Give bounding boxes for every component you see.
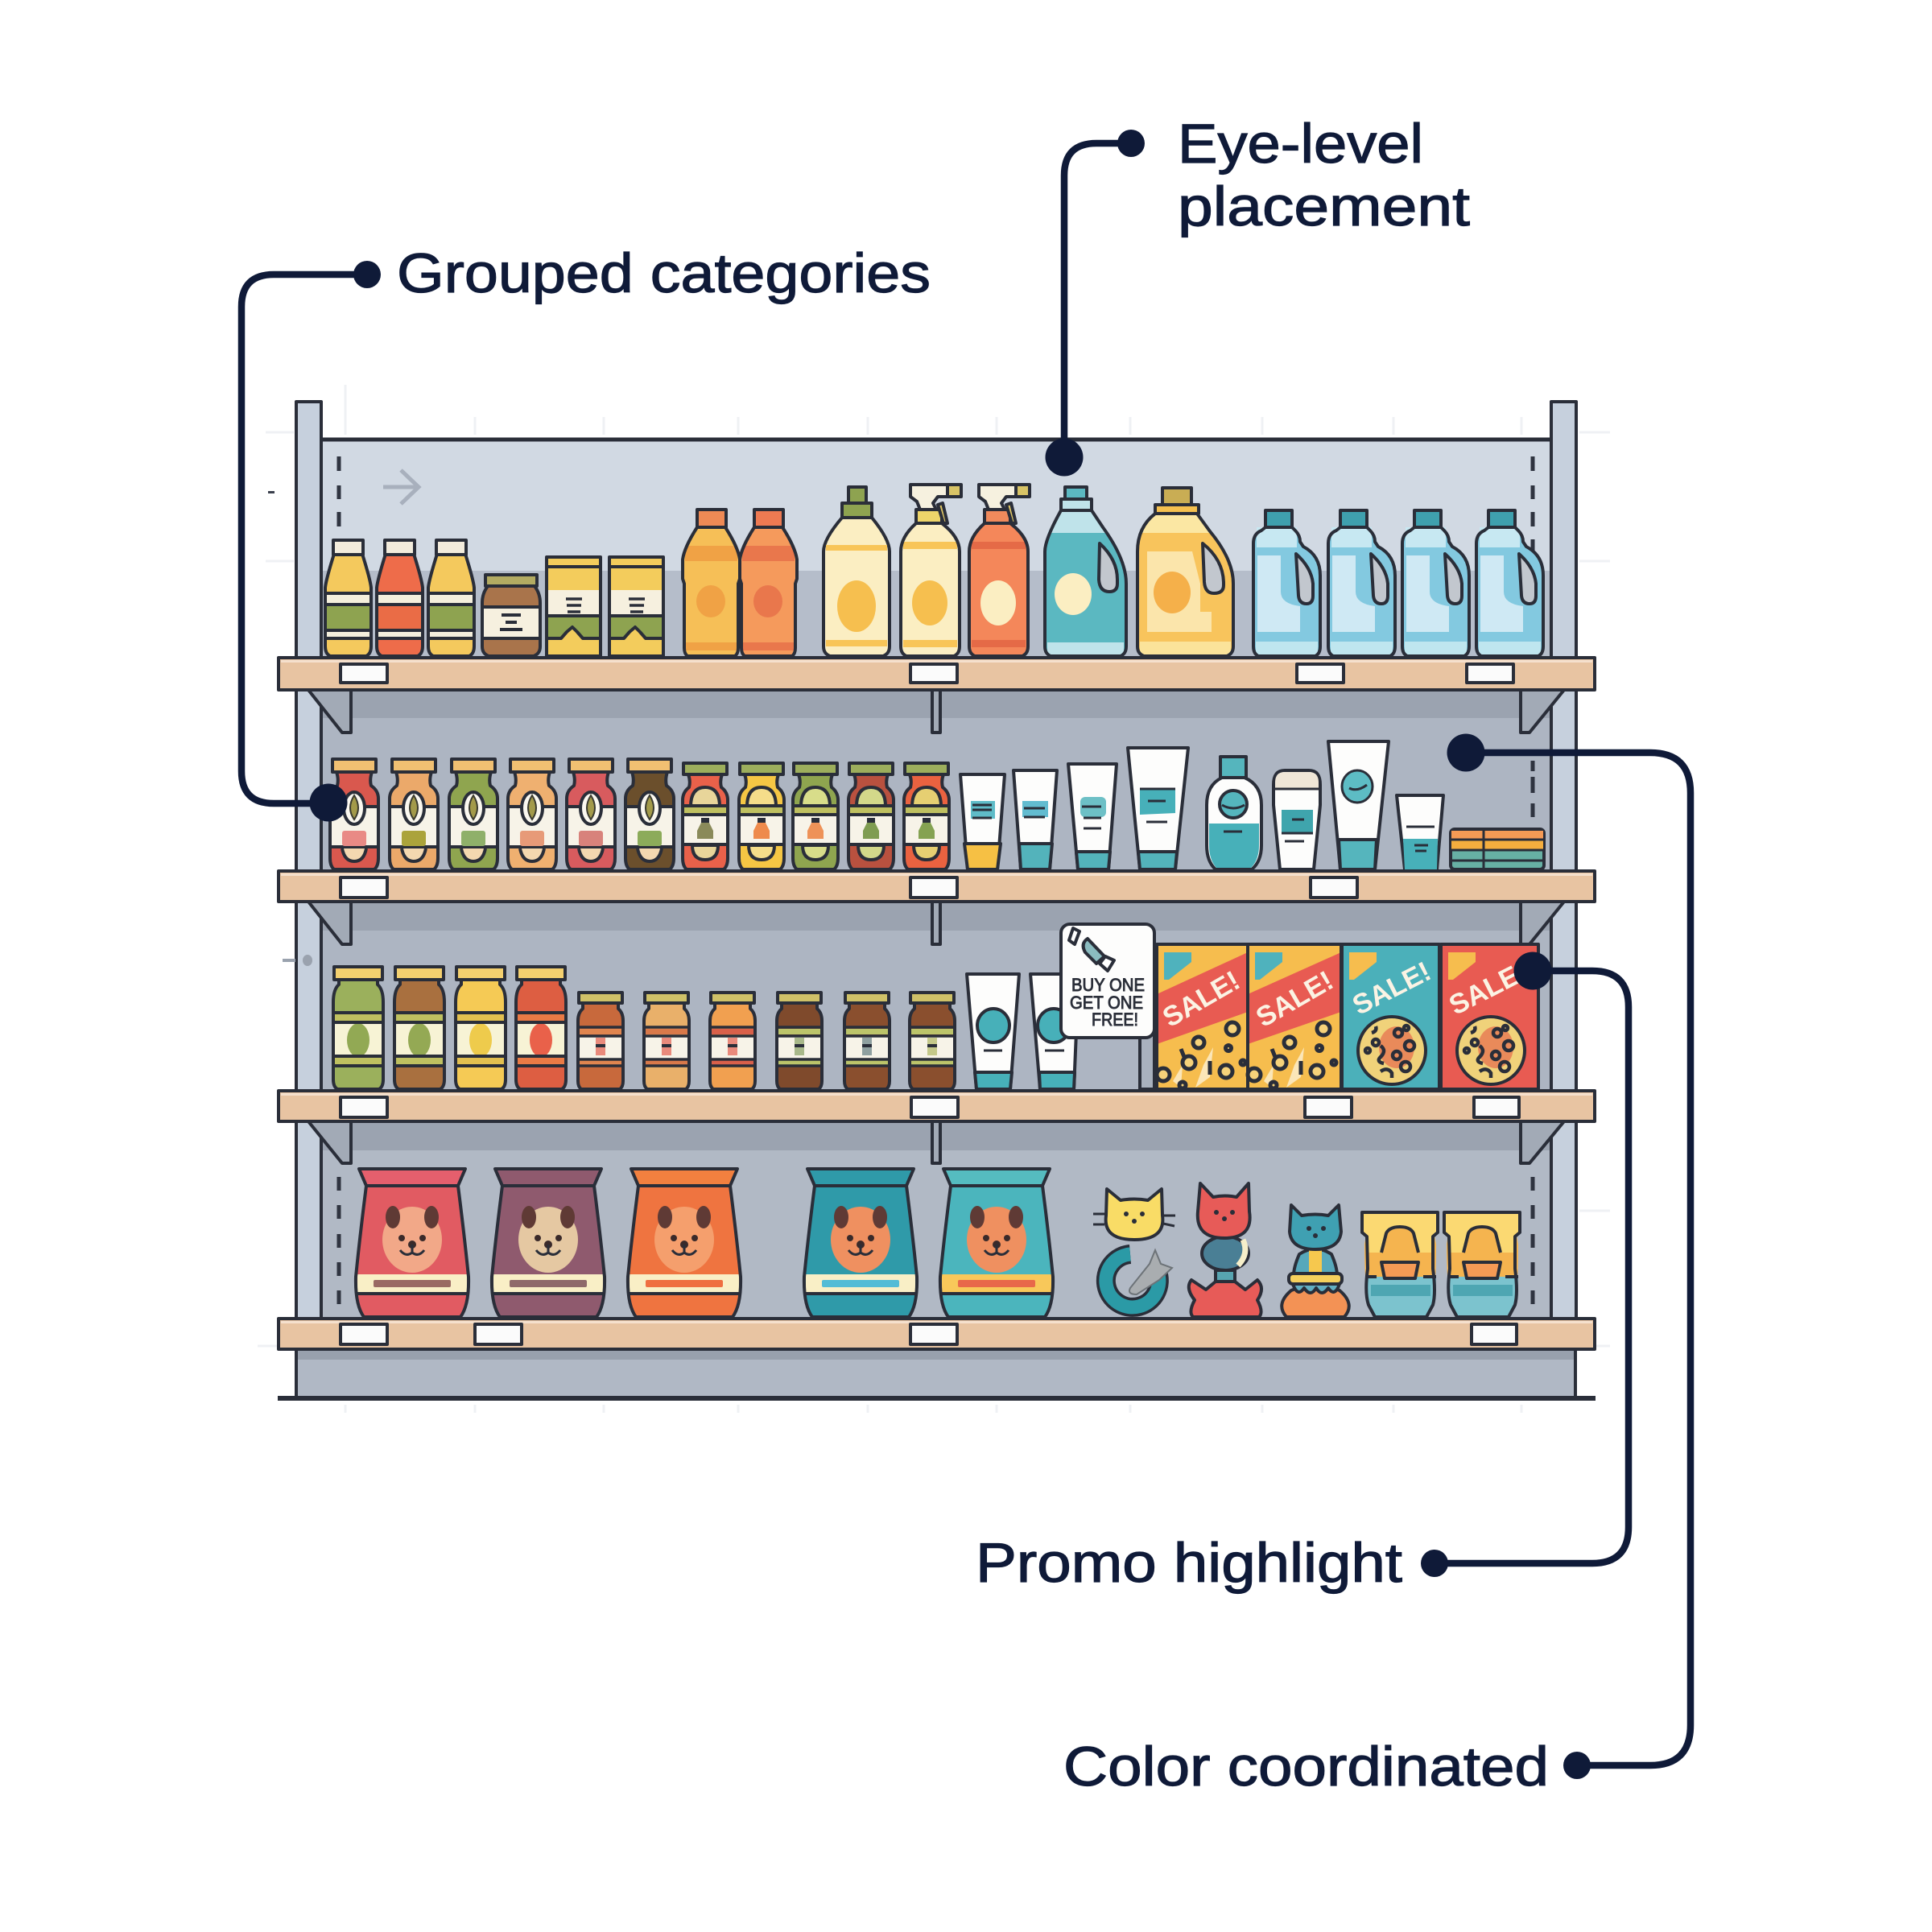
tall jars [333,967,566,1089]
shelves with price tags [279,658,1595,1349]
teal cat toy [1282,1205,1349,1317]
shelf board 2 [279,871,1595,902]
shelf board 1 [279,658,1595,690]
base plinth [278,1349,1596,1398]
leaf label bottles [330,759,674,869]
tube 4 [1128,748,1188,869]
yellow cat toy [1093,1189,1175,1307]
sale box 1 [1157,944,1248,1089]
yellow detergent jug [1137,488,1233,656]
back panel top edge [321,438,1551,441]
faint post marker [283,955,312,966]
shelf 1 products: eye-level bottles and jugs [325,485,1543,656]
capped cream tube [1274,770,1320,869]
short tube [1397,795,1443,869]
shelf 2 products: sauce bottles and tubes [330,741,1544,869]
back panel [321,440,1551,1349]
stacked soap bars [1451,829,1544,869]
callout: grouped categories [242,242,931,821]
callout: eye-level placement: placement [1178,175,1470,237]
sign text [1070,975,1145,1030]
callout: eye-level placement: Eye-level [1178,113,1423,175]
left upright post [296,402,321,1319]
callout: color coordinated: Color coordinated [1063,1736,1549,1798]
teal tube 1 [967,974,1019,1089]
tube 1 [960,774,1005,869]
small jars [578,993,955,1089]
treat pack 1 [1362,1212,1438,1317]
sign bottle icon [1069,928,1114,971]
sale box 2 [1248,944,1341,1089]
callout: promo highlight [976,952,1629,1594]
juice bottles [325,540,474,656]
callout: promo highlight: Promo highlight [976,1532,1402,1594]
cream pump bottle [824,487,890,656]
cereal boxes [547,557,663,656]
sign text: GET ONE [1070,993,1143,1013]
orange bottles [683,510,797,656]
spray bottle yellow [901,485,961,656]
tall tube with oval logo [1328,741,1389,869]
sale box 3: SALE! [1348,956,1436,1022]
sale box 4 [1441,944,1538,1089]
right upright post [1551,402,1576,1319]
sign text: BUY ONE [1071,975,1145,995]
callout: grouped categories: Grouped categories [397,242,931,304]
small margin tick [268,491,275,493]
sale box 2: SALE! [1251,965,1339,1034]
pet food bags [356,1169,1053,1317]
tube 3 [1068,764,1117,869]
tube 2 [1013,770,1057,869]
shelving unit frame [278,402,1596,1398]
callout: eye-level placement [1045,113,1470,477]
brown jar [482,575,540,656]
shelf 4 products: pet food bags, cat toys, treats [356,1169,1520,1317]
teal tube 2 behind sign [1030,974,1079,1089]
blue jugs [1253,510,1543,656]
peg hole dashes [339,456,1533,1304]
arch label bottles [683,763,949,869]
teal detergent jug [1045,487,1126,656]
promo sign [1061,924,1154,1089]
sale box 4: SALE! [1444,956,1533,1022]
faint background guide lines [258,385,1610,1413]
sale box 3 [1342,944,1439,1089]
shelf brackets [308,690,1564,1163]
red cat toy [1189,1183,1261,1317]
sign text: FREE! [1092,1009,1138,1030]
treat pack 2 [1444,1212,1520,1317]
shelf board 3 [279,1091,1595,1121]
shelf board 4 [279,1319,1595,1349]
lotion bottle [1207,757,1261,869]
faint direction arrow [383,470,419,504]
shelf 3 products: jars, tubes, promo sign, sale boxes [333,924,1538,1089]
callout: color coordinated [1063,734,1690,1798]
sale box 1: SALE! [1158,965,1245,1034]
spray bottle orange [969,485,1030,656]
